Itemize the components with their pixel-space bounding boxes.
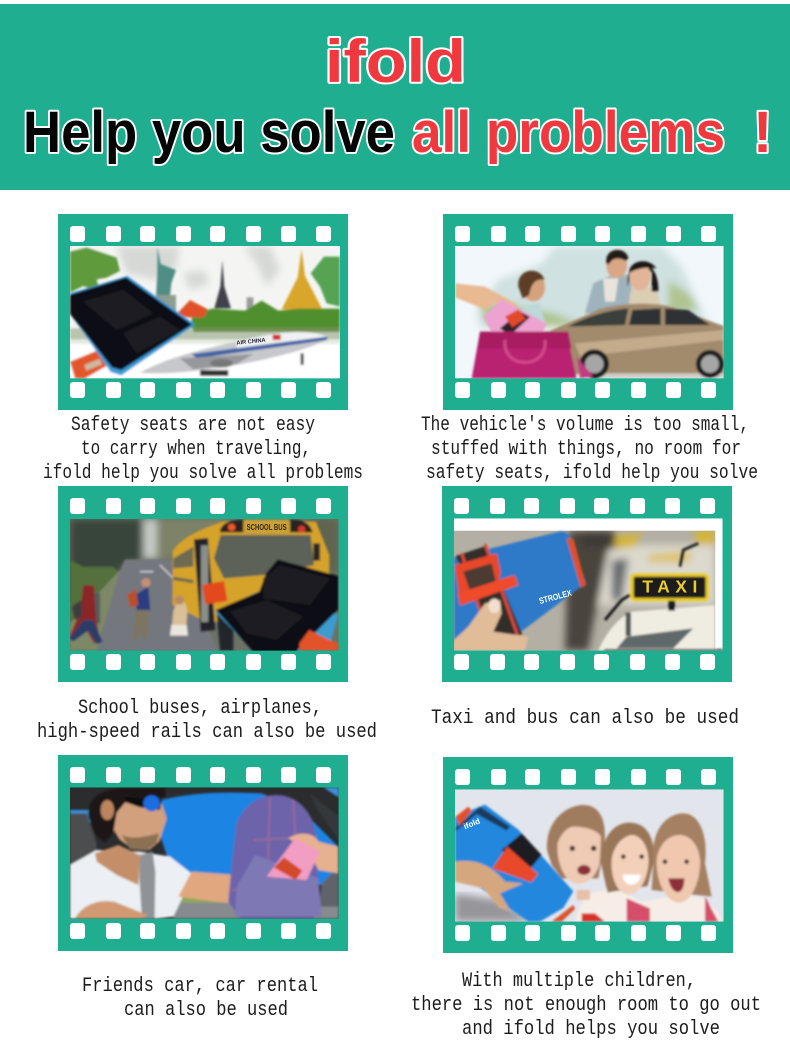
caption: children: [411, 970, 761, 1041]
caption: friends car: Friends car, car rental: [82, 975, 318, 998]
caption: friends car: can also be used: [124, 999, 288, 1022]
product brand: ifold: [462, 816, 481, 831]
photo: product in hand and taxi sign: [454, 518, 723, 651]
caption: children: and ifold helps you solve: [462, 1018, 720, 1041]
caption: travel: [43, 414, 363, 485]
plane label: AIR CHINA: [236, 338, 266, 347]
headline: Help you solve: [23, 100, 395, 165]
photo: family, car and stuffed bag: [455, 246, 724, 379]
header banner: [0, 4, 790, 190]
brand title: ifold: ifold: [325, 28, 466, 95]
headline: [23, 100, 772, 165]
panel: school bus film frame: [58, 486, 348, 682]
bus sign: SCHOOL BUS: [247, 522, 287, 532]
panel: taxi film frame: [442, 486, 732, 682]
headline: !: [753, 100, 772, 165]
photo: seat cushion with landmarks and airplane: [70, 246, 340, 378]
caption: school bus: [37, 697, 377, 744]
photo: school bus, children and seat cushion: [69, 519, 339, 653]
caption: children: With multiple children,: [462, 970, 696, 993]
caption: taxi: Taxi and bus can also be used: [431, 707, 739, 730]
panel: travel film frame: [58, 214, 348, 410]
caption: small car: [421, 414, 758, 485]
panel: friends car film frame: [58, 755, 348, 951]
caption: travel: ifold help you solve all problems: [43, 462, 363, 485]
panel: small car film frame: [443, 214, 733, 410]
caption: school bus: high-speed rails can also be used: [37, 721, 377, 744]
headline: all problems: [412, 100, 725, 165]
caption: friends car: [82, 975, 318, 1022]
panel: children film frame: [443, 757, 733, 953]
product brand: STROLEX: [538, 588, 573, 606]
taxi sign text: TAXI: [642, 577, 697, 597]
photo: driver with backpack holding product: [70, 787, 339, 919]
caption: travel: to carry when traveling,: [81, 438, 311, 461]
photo: three children with product: [455, 789, 724, 922]
caption: travel: Safety seats are not easy: [71, 414, 315, 437]
caption: school bus: School buses, airplanes,: [78, 697, 322, 720]
